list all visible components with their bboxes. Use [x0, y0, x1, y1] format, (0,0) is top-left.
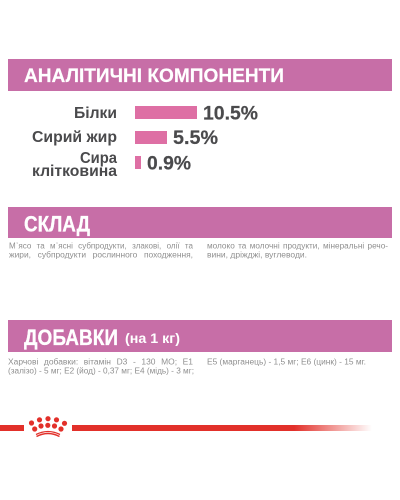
- row: protein: Білки: [74, 105, 117, 122]
- heading band: additives: (на 1 кг): [125, 330, 180, 346]
- footer: brand line and crown: [0, 416, 372, 436]
- row: crude fibre: клітковина: [32, 163, 117, 180]
- text block: additives left column: [8, 358, 194, 376]
- text block: composition left column: М᾿ясо та м᾿ясні субпродукти, злакові, олії та: [9, 242, 194, 250]
- heading band: composition: СКЛАД: [24, 212, 90, 236]
- heading band: additives: [8, 320, 392, 352]
- panel: composition: [8, 207, 392, 260]
- panel: analytical components: [8, 59, 392, 180]
- heading band: analytical components: АНАЛІТИЧНІ КОМПОНЕНТИ: [24, 65, 284, 87]
- text block: composition left column: [9, 242, 194, 260]
- text block: additives left column: Харчові добавки: вітамін D3 - 130 МО; Е1: [8, 358, 193, 366]
- row: protein: 10.5%: [203, 102, 258, 124]
- panel: additives: [8, 320, 392, 376]
- row: protein: [74, 102, 258, 124]
- line: right red fading segment: [72, 425, 372, 431]
- text block: composition right column: молоко та молочні продукти, мінеральні речо-: [207, 242, 388, 250]
- row: crude fat: 5.5%: [173, 127, 218, 149]
- row: crude fibre: [32, 150, 191, 180]
- text block: additives right column: Е5 (марганець) - 1,5 мг; Е6 (цинк) - 15 мг.: [207, 358, 366, 366]
- heading band: additives: ДОБАВКИ: [24, 325, 118, 350]
- icon: royal canin crown: [29, 416, 67, 436]
- heading band: analytical components: [8, 59, 392, 91]
- text block: composition right column: вини, дріжджі, вуглеводи.: [207, 250, 307, 260]
- line: left red segment: [0, 425, 24, 431]
- text block: additives left column: (залізо) - 5 мг; Е2 (йод) - 0,37 мг; Е4 (мідь) - 3 мг;: [8, 366, 194, 376]
- heading band: composition: [8, 207, 392, 238]
- row: crude fibre: 0.9%: [147, 152, 191, 174]
- text block: composition left column: жири, субпродукти рослинного походження,: [9, 250, 193, 260]
- row: crude fat: Сирий жир: [32, 129, 117, 146]
- row: crude fibre: Сира: [80, 150, 117, 167]
- text block: composition right column: [207, 242, 388, 260]
- row: crude fat: [32, 127, 218, 149]
